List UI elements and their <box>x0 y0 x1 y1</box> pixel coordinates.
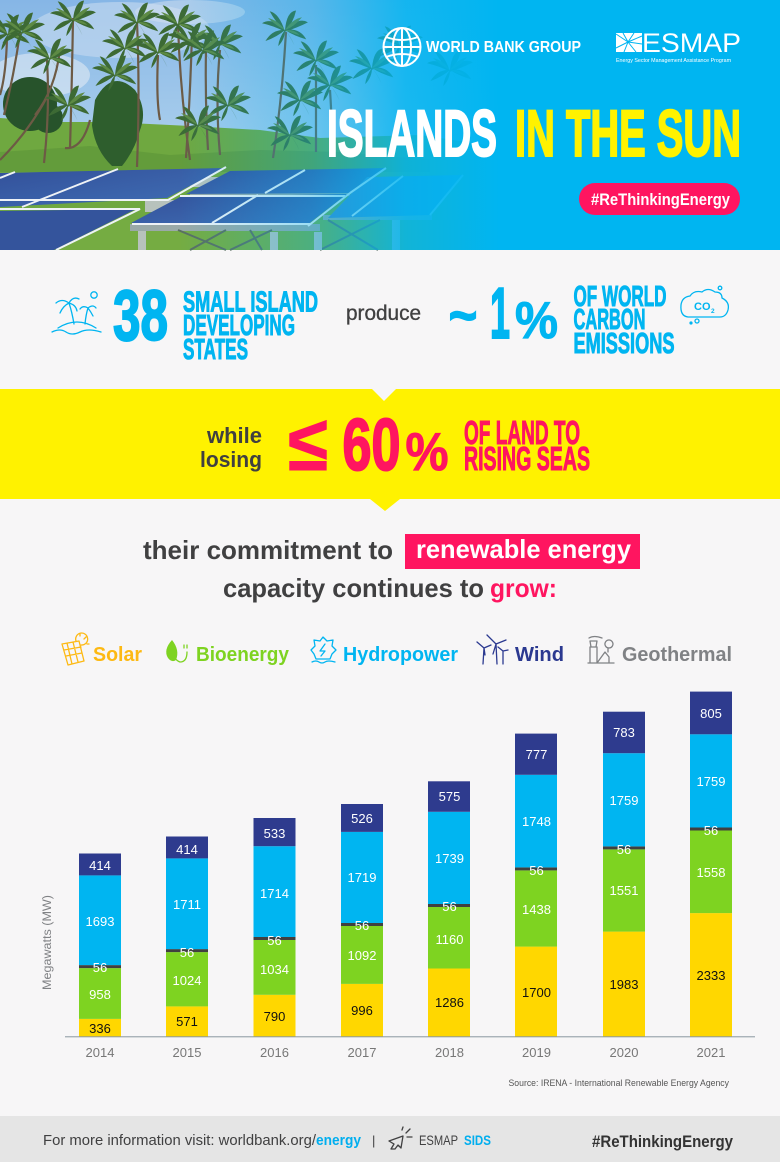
legend item: bioenergy <box>166 640 290 666</box>
stat: 38 small island developing states: DEVELOPING <box>183 310 295 342</box>
bar: 2020: 1759 <box>610 793 638 808</box>
bar: 2014: 958 <box>89 987 111 1002</box>
bar: 2015: 1024 <box>173 973 201 988</box>
footer bar <box>0 1116 780 1162</box>
bar: 2018: 1160 <box>436 932 463 947</box>
stat: up to 60 percent: ≤ <box>288 399 328 487</box>
bar: 2016: 790 <box>264 1009 285 1024</box>
stat: 38 small island developing states: SMALL ISLAND <box>183 286 318 318</box>
bar: 2017: 1719 <box>348 870 376 885</box>
legend item: solar <box>62 633 142 666</box>
icon: CO2 cloud: 2 <box>711 308 715 315</box>
World Bank Group logo <box>384 28 581 66</box>
bar: 2015 <box>166 836 208 1060</box>
bar: 2019: 56 <box>529 863 544 878</box>
bar: 2018: 56 <box>442 899 457 914</box>
bar: 2014: 2014 <box>86 1045 114 1060</box>
stat: up to 60 percent <box>288 399 448 487</box>
bar: 2014: 336 <box>89 1021 111 1036</box>
legend item: geothermal: Geothermal <box>622 644 732 666</box>
heading: commitment to renewable energy: grow: <box>490 573 557 603</box>
icon: CO2 cloud: CO <box>694 301 711 313</box>
bar: 2015: 571 <box>176 1014 198 1029</box>
ESMAP logo: Energy Sector Management Assistance Program <box>616 58 731 64</box>
header banner with photo of palms and solar panels <box>0 0 780 250</box>
bar: 2019: 1700 <box>522 985 551 1000</box>
bar: 2019: 1748 <box>522 814 551 829</box>
heading: commitment to renewable energy <box>143 534 640 603</box>
bar: 2021 <box>690 692 732 1060</box>
icon: CO2 cloud <box>681 286 728 325</box>
bar: 2017: 996 <box>351 1003 373 1018</box>
icon: click cursor <box>389 1127 412 1149</box>
footer link text: For more information visit: worldbank.org/ <box>43 1133 317 1149</box>
heading: commitment to renewable energy: renewable energy <box>416 534 632 564</box>
World Bank Group logo: WORLD BANK GROUP <box>426 39 581 56</box>
footer ESMAP SIDS: SIDS <box>464 1132 491 1148</box>
axis title: Megawatts (MW) <box>42 895 54 990</box>
footer hashtag: #ReThinkingEnergy <box>592 1132 733 1151</box>
legend item: solar: Solar <box>93 644 142 666</box>
legend item: wind: Wind <box>515 644 564 666</box>
title <box>327 96 741 170</box>
text: of land to rising seas: RISING SEAS <box>464 440 590 477</box>
bar: 2020: 783 <box>613 725 635 740</box>
text: of world carbon emissions: OF WORLD <box>574 281 666 313</box>
bar: 2020 <box>603 712 645 1060</box>
text: while losing <box>200 423 262 472</box>
bar: 2018: 1739 <box>435 851 464 866</box>
stat: 38 small island developing states: 38 <box>113 277 168 356</box>
legend item: wind <box>477 635 564 666</box>
yellow band: land loss <box>0 389 780 511</box>
footer ESMAP SIDS: ESMAP <box>419 1132 458 1148</box>
text: of land to rising seas: OF LAND TO <box>464 414 580 451</box>
bar: 2017: 2017 <box>348 1045 376 1060</box>
title: ISLANDS <box>327 96 497 170</box>
bar: 2017: 1092 <box>348 948 376 963</box>
bar: 2021: 1558 <box>697 865 725 880</box>
source note: Source: IRENA - International Renewable Energy Agency <box>508 1078 729 1089</box>
bar: 2020: 56 <box>617 842 631 857</box>
bar: 2018 <box>428 781 470 1060</box>
bar: 2014: 414 <box>89 858 111 873</box>
stat: about 1 percent: 1 <box>490 274 510 354</box>
bar: 2016: 1034 <box>260 962 289 977</box>
legend item: hydropower: Hydropower <box>343 644 458 666</box>
bar: 2019: 1438 <box>522 902 551 917</box>
bar: 2017 <box>341 804 383 1060</box>
bar: 2021: 1759 <box>697 774 725 789</box>
legend <box>62 633 732 666</box>
text: while losing: while <box>206 423 262 448</box>
bar: 2016: 533 <box>264 826 285 841</box>
bar: 2019: 2019 <box>522 1045 551 1060</box>
bar: 2018: 575 <box>439 789 460 804</box>
bar: 2016: 56 <box>267 933 282 948</box>
icon: palm island <box>52 292 101 334</box>
bar: 2017: 526 <box>351 811 373 826</box>
ESMAP logo: ESMAP <box>642 28 741 58</box>
bar: 2021: 2333 <box>697 968 725 983</box>
bar: 2015: 56 <box>180 945 194 960</box>
bar: 2020: 1983 <box>610 977 638 992</box>
footer ESMAP SIDS <box>419 1132 491 1148</box>
stat: 38 small island developing states: STATES <box>183 334 248 366</box>
stat: 38 small island developing states <box>113 277 318 366</box>
bar: 2020: 2020 <box>610 1045 638 1060</box>
bar: 2014: 56 <box>93 960 107 975</box>
stat: up to 60 percent: 60 <box>342 405 400 486</box>
bar: 2014 <box>79 854 121 1060</box>
hashtag pill <box>579 183 740 215</box>
legend item: bioenergy: Bioenergy <box>196 644 290 666</box>
bar: 2020: 1551 <box>610 883 638 898</box>
footer link text: | <box>372 1133 375 1148</box>
bar: 2018: 1286 <box>435 995 464 1010</box>
bar: 2014: 1693 <box>86 914 114 929</box>
ESMAP logo <box>616 28 741 64</box>
legend item: hydropower <box>311 637 458 666</box>
bar: 2019 <box>515 734 557 1060</box>
bar: 2018: 2018 <box>435 1045 464 1060</box>
text: of world carbon emissions <box>574 281 674 360</box>
bar: 2017: 56 <box>355 918 369 933</box>
text: of land to rising seas <box>464 414 590 477</box>
text: of world carbon emissions: CARBON <box>574 304 646 336</box>
heading: commitment to renewable energy: capacity continues to <box>223 573 484 603</box>
stat: about 1 percent: ~ <box>449 287 477 345</box>
hashtag pill: #ReThinkingEnergy <box>591 191 731 209</box>
bar: 2016 <box>254 818 296 1060</box>
text: produce: produce <box>346 302 421 325</box>
stacked bar chart <box>42 692 755 1060</box>
footer link text: energy <box>316 1133 361 1149</box>
bar: 2021: 56 <box>704 823 718 838</box>
bar: 2021: 805 <box>700 706 722 721</box>
stat: about 1 percent: % <box>515 292 558 350</box>
stat: up to 60 percent: % <box>406 423 448 482</box>
stat: about 1 percent <box>449 274 558 354</box>
bar: 2015: 2015 <box>173 1045 201 1060</box>
text: while losing: losing <box>200 447 262 472</box>
bar: 2015: 1711 <box>173 897 201 912</box>
text: of world carbon emissions: EMISSIONS <box>574 328 674 360</box>
bar: 2016: 2016 <box>260 1045 289 1060</box>
heading: commitment to renewable energy: their commitment to <box>143 535 393 565</box>
legend item: geothermal <box>588 636 732 666</box>
bar: 2021: 2021 <box>697 1045 725 1060</box>
bar: 2019: 777 <box>526 747 547 762</box>
bar: 2015: 414 <box>176 842 198 857</box>
bar: 2016: 1714 <box>260 886 289 901</box>
